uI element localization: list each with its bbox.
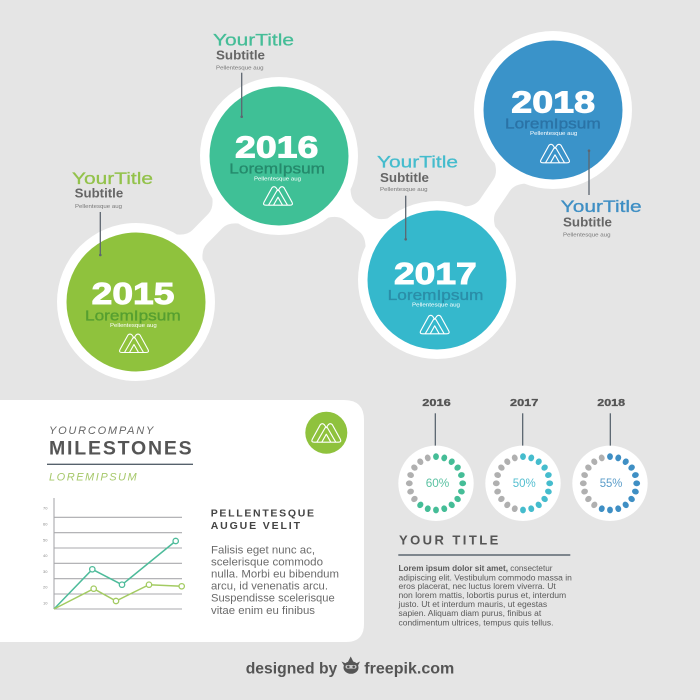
heading: milestones: MILESTONES (49, 437, 192, 459)
milestone circle: 2016: LoremIpsum (229, 160, 325, 177)
icon: logo badge (305, 412, 347, 454)
milestone circle: 2018: 2018 (511, 84, 595, 119)
callout: 2015 title: Subtitle (75, 187, 123, 201)
callout: 2015 title (72, 169, 153, 256)
milestone circle: 2015 (66, 232, 206, 372)
text block: your title: Lorem ipsum dolor sit amet, consectetur (398, 564, 553, 573)
callout: 2017 title (377, 153, 458, 241)
gauge: 2016 60%: 60% (426, 476, 450, 490)
callout: 2016 title: YourTitle (213, 31, 294, 50)
callout: 2017 title: Subtitle (380, 171, 429, 185)
text block: pellentesque: arcu, id venenatis arcu. (211, 580, 328, 592)
text block: your title: adipiscing elit. Vestibulum commodo massa in (398, 573, 572, 582)
text block: your title: eros placerat, nec luctus lorem viverra. Ut (398, 582, 557, 591)
milestone circle: 2018: Pellentesque aug (530, 131, 577, 137)
gauge: 2018 55%: 55% (600, 476, 623, 490)
callout: 2016 title: Pellentesque aug (216, 65, 264, 71)
milestone circle: 2016: Pellentesque aug (254, 176, 301, 182)
callout: 2017 title: Pellentesque aug (380, 187, 428, 193)
milestone circle: 2017 (368, 210, 506, 350)
milestone circle: 2015: Pellentesque aug (110, 323, 157, 329)
line chart: 20 (43, 584, 48, 590)
gauge: 2017 50% (485, 398, 561, 521)
milestone circle: 2017: Pellentesque aug (412, 303, 460, 309)
panel: milestones (0, 400, 364, 642)
callout: 2016 title: Subtitle (216, 48, 265, 62)
footer: freepik credit (246, 656, 454, 677)
milestone circle: 2015: LoremIpsum (85, 308, 181, 325)
text block: your title: sapien. Aliquam diam purus, finibus at (398, 609, 542, 618)
text block: your title: non lorem mattis, lobortis purus et, interdum (398, 591, 567, 600)
heading: milestones: LOREMIPSUM (49, 471, 138, 483)
text block: your title: justo. Ut et interdum mauris, ut egestas (397, 600, 547, 609)
callout: 2016 title (213, 31, 294, 118)
line chart (43, 498, 184, 609)
text block: pellentesque: PELLENTESQUE (211, 508, 314, 520)
callout: 2018 title (561, 149, 642, 239)
icon: freepik mascot (342, 656, 360, 674)
text block: pellentesque: Falisis eget nunc ac, (211, 544, 315, 556)
line chart: 40 (43, 553, 48, 558)
line chart: 10 (43, 600, 48, 606)
gauge: 2017 50%: 50% (513, 476, 536, 490)
callout: 2015 title: Pellentesque aug (75, 204, 122, 210)
line chart: 70 (43, 506, 48, 510)
footer: freepik credit: freepik.com (364, 660, 454, 677)
callout: 2018 title: Subtitle (563, 216, 612, 230)
gauge: 2016 60%: 2016 (422, 398, 451, 409)
gauge: 2018 55% (572, 398, 648, 521)
gauge: 2016 60% (398, 398, 474, 521)
milestone circle: 2015: 2015 (92, 276, 174, 311)
callout: 2017 title: YourTitle (377, 153, 458, 172)
milestone circle: 2016 (210, 86, 348, 226)
text block: your title: condimentum ultrices, tempus quis tellus. (398, 618, 554, 627)
milestone circle: 2018 (484, 40, 622, 180)
milestone circle: 2017: LoremIpsum (388, 287, 483, 304)
line chart: 50 (43, 538, 48, 542)
milestone circle: 2016: 2016 (235, 129, 318, 164)
timeline connectors and white rings (57, 31, 632, 381)
text block: pellentesque: Suspendisse scelerisque (211, 593, 335, 605)
heading: milestones (47, 425, 193, 483)
footer: freepik credit: designed by (246, 660, 337, 677)
text block: pellentesque: scelerisque commodo (211, 556, 323, 568)
text block: pellentesque (211, 508, 339, 617)
callout: 2018 title: Pellentesque aug (563, 233, 610, 239)
line chart: 60 (43, 522, 48, 526)
milestone circle: 2017: 2017 (394, 256, 477, 291)
callout: 2018 title: YourTitle (561, 197, 642, 216)
gauge: 2018 55%: 2018 (597, 398, 626, 409)
text block: pellentesque: AUGUE VELIT (211, 520, 301, 532)
gauge: 2017 50%: 2017 (510, 398, 539, 409)
text block: pellentesque: nulla. Morbi eu bibendum (211, 568, 339, 580)
text block: your title (397, 532, 572, 627)
milestone circle: 2018: LoremIpsum (505, 116, 601, 133)
line chart: 30 (43, 569, 48, 574)
callout: 2015 title: YourTitle (72, 169, 153, 188)
heading: milestones: YOURCOMPANY (49, 425, 154, 437)
text block: pellentesque: vitae enim eu finibus (211, 605, 316, 617)
text block: your title: YOUR TITLE (399, 532, 499, 547)
